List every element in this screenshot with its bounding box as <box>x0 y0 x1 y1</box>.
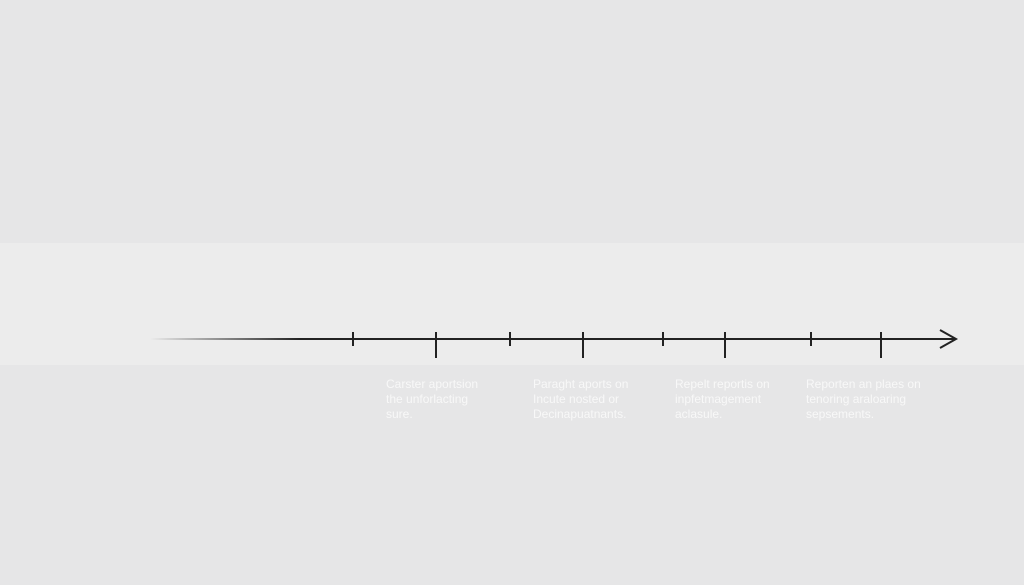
text 2: Incute nosted or <box>533 392 619 406</box>
band <box>0 243 1024 365</box>
text 3 <box>675 377 770 421</box>
text 4 <box>806 377 921 421</box>
text 1 <box>386 377 478 421</box>
text 3: aclasule. <box>675 407 722 421</box>
text 3: inpfetmagement <box>675 392 761 406</box>
text 1: sure. <box>386 407 413 421</box>
text 1: the unforlacting <box>386 392 468 406</box>
text 4: tenoring araloaring <box>806 392 906 406</box>
text 3: Repelt reportis on <box>675 377 770 391</box>
text 1: Carster aportsion <box>386 377 478 391</box>
text 2: Paraght aports on <box>533 377 628 391</box>
text 4: Reporten an plaes on <box>806 377 921 391</box>
text 4: sepsements. <box>806 407 874 421</box>
text 2 <box>533 377 628 421</box>
text 2: Decinapuatnants. <box>533 407 626 421</box>
